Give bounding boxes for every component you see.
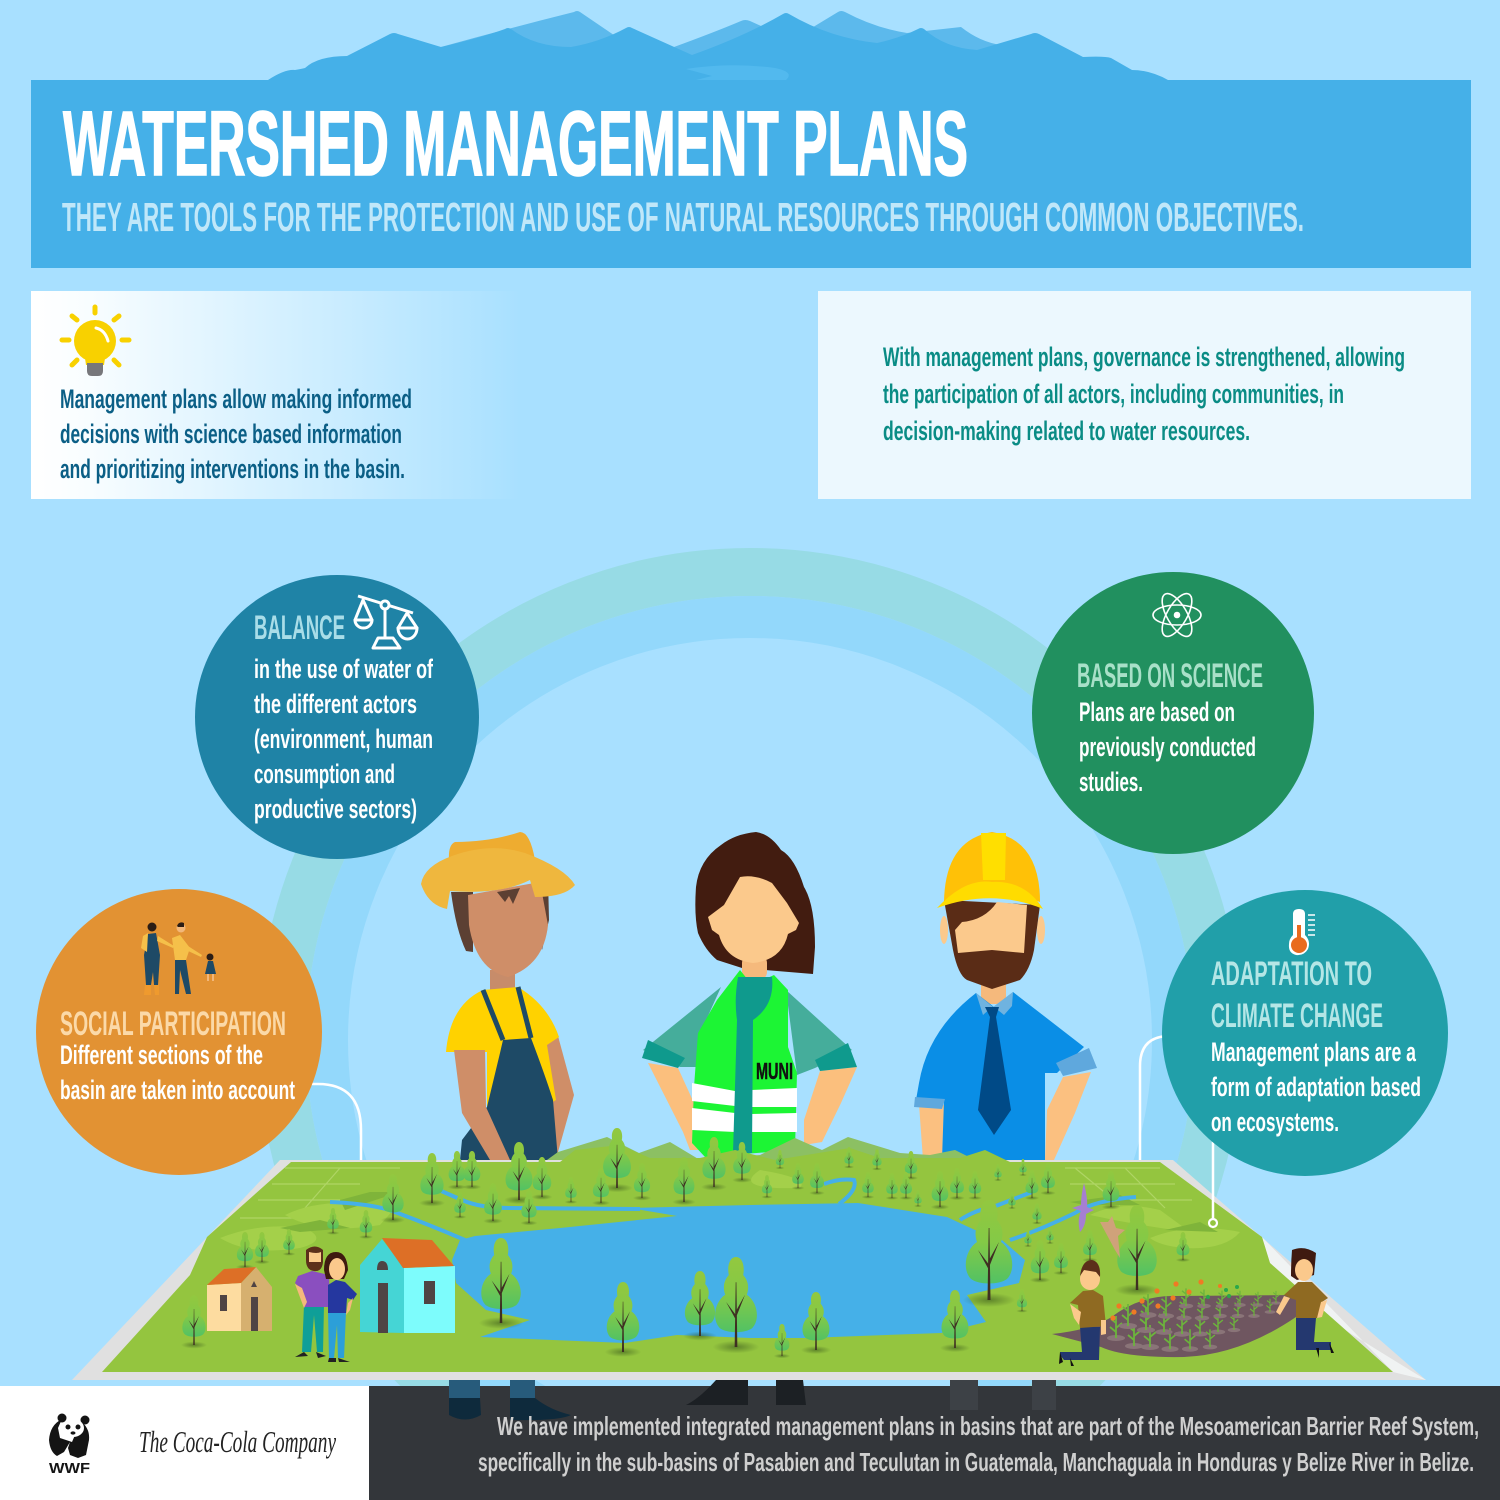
person: farmer bbox=[421, 832, 575, 1160]
bird bbox=[1072, 1183, 1094, 1232]
icon: atom bbox=[1153, 589, 1201, 641]
text block bbox=[60, 384, 412, 484]
rivers bbox=[330, 1180, 1136, 1240]
panel: informed decisions bbox=[31, 291, 521, 499]
text block: in the use of water of bbox=[254, 654, 434, 684]
worker arms bbox=[648, 1063, 857, 1150]
circle: adaptation to climate change bbox=[1162, 890, 1448, 1176]
engineer face bbox=[955, 902, 1027, 953]
mountains: back ridge bbox=[441, 11, 1001, 80]
icon: scales bbox=[355, 596, 417, 648]
text block: and prioritizing interventions in the basin. bbox=[60, 454, 405, 484]
text block: Plans are based on bbox=[1079, 697, 1235, 727]
heading: BASED ON SCIENCE bbox=[1077, 657, 1263, 695]
legs below the map bbox=[449, 1380, 1056, 1420]
farmer face bbox=[468, 882, 548, 977]
engineer hair and beard bbox=[944, 900, 1040, 989]
text block: studies. bbox=[1079, 767, 1143, 797]
farmer right arm bbox=[545, 1036, 574, 1160]
farmer neck bbox=[490, 970, 515, 998]
text block bbox=[1211, 1037, 1421, 1137]
deer shape bbox=[1100, 1216, 1125, 1258]
worker neck bbox=[742, 955, 767, 980]
icon: light bulb bbox=[62, 307, 129, 376]
panel: governance bbox=[818, 291, 1471, 499]
worker hair bbox=[695, 832, 815, 974]
engineer helmet bbox=[944, 832, 1040, 902]
heading bbox=[1211, 955, 1383, 1035]
text block: decision-making related to water resources. bbox=[883, 416, 1250, 446]
small house bbox=[207, 1267, 272, 1331]
footer: logo panel bbox=[0, 1386, 369, 1500]
worker badge text: MUNI bbox=[756, 1058, 793, 1084]
worker vest bbox=[692, 970, 797, 1157]
text block: productive sectors) bbox=[254, 794, 417, 824]
connector: right bbox=[1140, 1036, 1170, 1160]
worker sleeves bbox=[643, 987, 852, 1075]
map frame bbox=[72, 1160, 1426, 1380]
circle: balance bbox=[195, 575, 479, 859]
icon: thermometer bbox=[1289, 909, 1315, 955]
connector: left bbox=[303, 1084, 361, 1160]
farmer left arm bbox=[454, 1050, 510, 1160]
engineer tie bbox=[978, 1007, 1011, 1135]
engineer shirt bbox=[916, 992, 1084, 1160]
text block bbox=[1079, 697, 1256, 797]
text block: Management plans allow making informed bbox=[60, 384, 412, 414]
logo: WWF panda: WWF bbox=[49, 1460, 90, 1477]
text block: previously conducted bbox=[1079, 732, 1256, 762]
map back hills bbox=[540, 1137, 985, 1165]
engineer collar bbox=[976, 992, 1013, 1015]
text block bbox=[254, 654, 434, 824]
lake bbox=[452, 1203, 1025, 1343]
heading: SOCIAL PARTICIPATION bbox=[60, 1005, 286, 1043]
map ground bbox=[102, 1145, 1393, 1372]
logo: WWF panda bbox=[49, 1414, 90, 1477]
arch ring bbox=[282, 572, 1218, 1500]
panel: header bbox=[31, 80, 1471, 268]
farmer overalls bbox=[460, 1038, 558, 1160]
circle: social participation bbox=[36, 889, 322, 1175]
logo: The Coca-Cola Company: The Coca-Cola Company bbox=[139, 1424, 336, 1459]
mountains: front ridge bbox=[268, 13, 1168, 80]
farmer shirt bbox=[446, 987, 559, 1120]
map field lines bbox=[240, 1168, 1192, 1218]
text block: (environment, human bbox=[254, 724, 433, 754]
text block: basin are taken into account bbox=[60, 1075, 295, 1105]
circle: based on science bbox=[1032, 572, 1314, 854]
engineer arms bbox=[919, 1072, 1091, 1160]
crop field bbox=[1052, 1279, 1296, 1357]
heading: ADAPTATION TO bbox=[1211, 955, 1372, 993]
text block: decisions with science based information bbox=[60, 419, 402, 449]
farmer hair bbox=[451, 878, 549, 952]
person: municipal worker bbox=[642, 832, 857, 1157]
icon: family bbox=[141, 922, 216, 995]
mountain lake bbox=[686, 65, 789, 80]
farmer hat bbox=[449, 832, 535, 880]
farmer kneeling: man bbox=[1059, 1260, 1106, 1366]
person: engineer bbox=[914, 832, 1097, 1160]
text block: Different sections of the bbox=[60, 1040, 263, 1070]
connector: adaptation pointer bbox=[1209, 1142, 1217, 1227]
text block bbox=[60, 1040, 295, 1105]
worker inner shirt bbox=[733, 977, 772, 1153]
engineer cuffs bbox=[914, 1048, 1097, 1109]
text block: the different actors bbox=[254, 689, 417, 719]
worker face bbox=[708, 876, 799, 963]
couple: man bbox=[295, 1246, 330, 1358]
map terrain hills bbox=[220, 1170, 1240, 1250]
footer: note panel bbox=[369, 1380, 1500, 1500]
text block bbox=[478, 1411, 1479, 1477]
text block: on ecosystems. bbox=[1211, 1107, 1339, 1137]
worker vest reflective stripes bbox=[692, 1083, 797, 1132]
engineer ears bbox=[940, 916, 948, 944]
text block: consumption and bbox=[254, 759, 395, 789]
engineer neck bbox=[981, 980, 1006, 1004]
couple: woman bbox=[324, 1252, 357, 1362]
text block bbox=[883, 342, 1405, 446]
heading: BALANCE bbox=[254, 609, 345, 647]
farmer kneeling: woman bbox=[1276, 1248, 1334, 1358]
trees bbox=[181, 1128, 1190, 1358]
big house bbox=[360, 1238, 455, 1333]
map bbox=[72, 1128, 1426, 1380]
worker cuffs bbox=[642, 1040, 857, 1071]
